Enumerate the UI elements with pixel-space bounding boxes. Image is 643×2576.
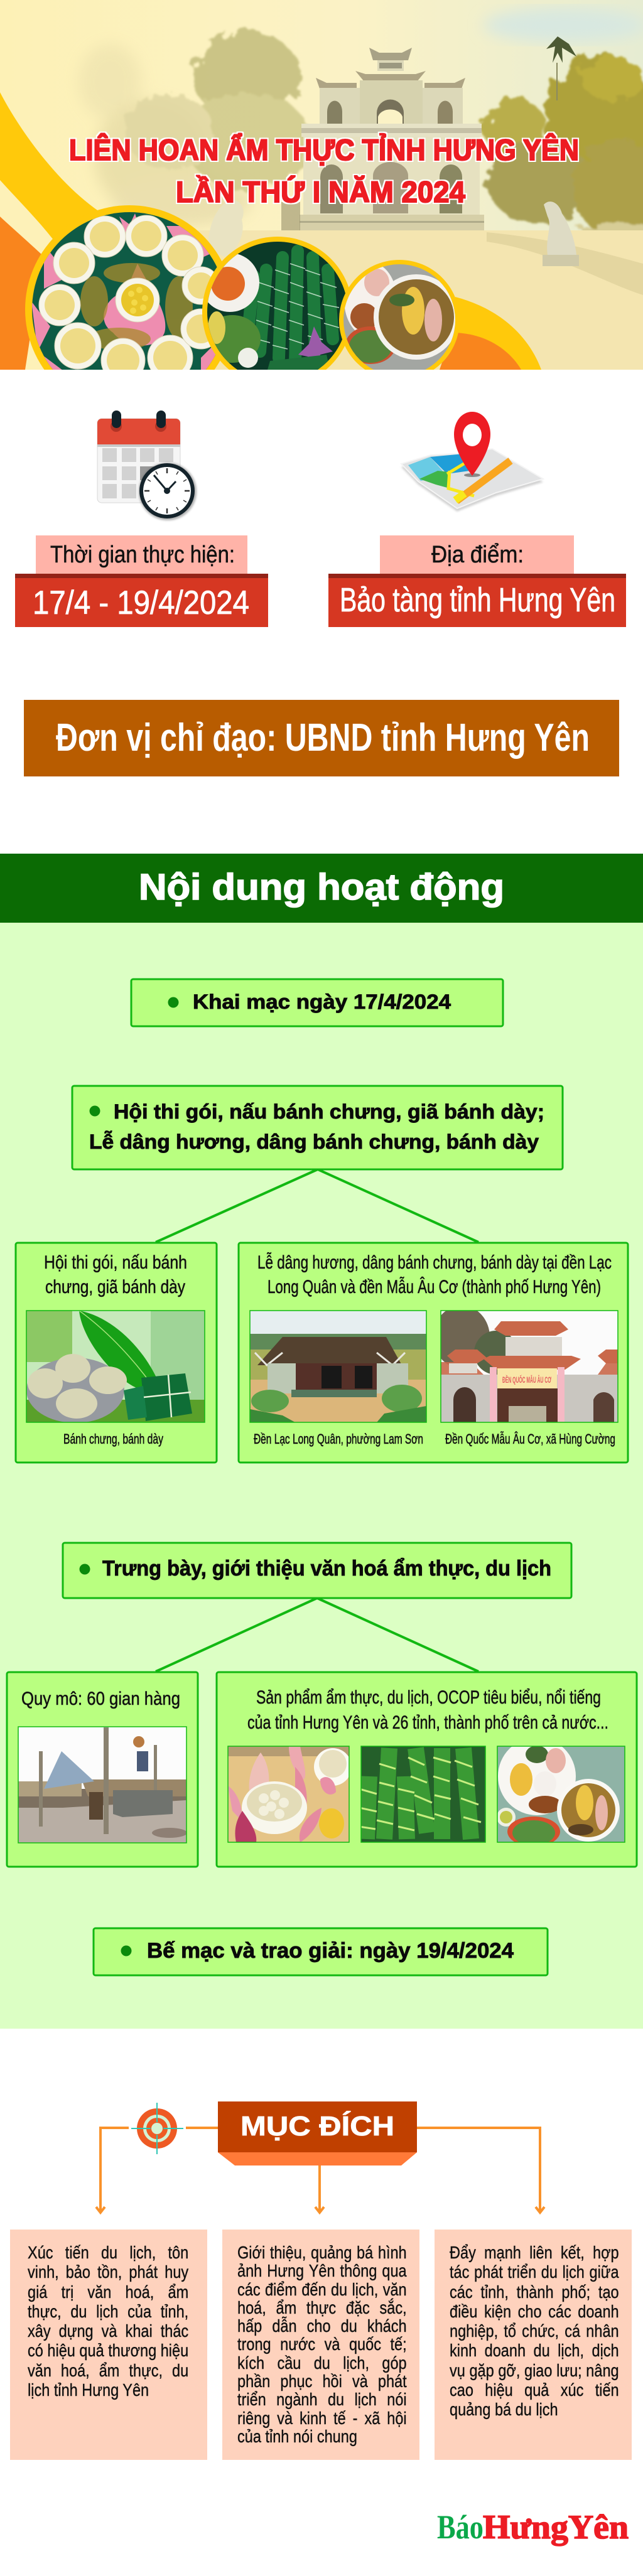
- activity: closing: [94, 1928, 548, 1975]
- panel: purpose three: nghiệp, tổ chức, cá nhân: [450, 2321, 619, 2341]
- lower right swoosh: [452, 297, 541, 370]
- icon: map with location pin: [401, 412, 543, 512]
- panel: scale: [7, 1672, 198, 1867]
- activity: closing: Bế mạc và trao giải: ngày 19/4/2024: [147, 1939, 514, 1963]
- panel: purpose one: giá trị văn hoá, ẩm: [28, 2282, 188, 2301]
- activity: opening: Khai mạc ngày 17/4/2024: [193, 990, 451, 1013]
- temple gate: [281, 48, 484, 230]
- arrows: purpose connectors: [96, 2128, 544, 2213]
- panel: purpose three: [435, 2230, 632, 2460]
- photo: noodle platter: [497, 1746, 624, 1842]
- label: venue: Địa điểm:: [431, 542, 524, 568]
- panel: purpose one: thực, du lịch của tỉnh,: [28, 2302, 188, 2321]
- activity: opening: [131, 979, 503, 1026]
- stone lion statue left: [208, 200, 244, 257]
- photo: Quoc Mau Au Co temple: [433, 1306, 618, 1422]
- stone lion statue right: [543, 201, 579, 266]
- panel: purpose one: xây dựng và khai thác: [28, 2321, 188, 2341]
- food circle: banh gio rolls: [202, 237, 349, 370]
- heading: purpose: MỤC ĐÍCH: [240, 2110, 394, 2142]
- logo: Bao Hung Yen: HưngYên: [483, 2508, 629, 2546]
- hero title: [69, 133, 579, 208]
- heading: activities: [0, 854, 643, 923]
- panel: purpose three: vụ gặp gỡ, giao lưu; nâng: [450, 2360, 619, 2380]
- connector: contest branches: [156, 1169, 478, 1242]
- panel: purpose two: của tỉnh nói chung: [237, 2427, 357, 2446]
- photo: stalls under construction: [18, 1727, 187, 1843]
- panel: purpose one: vinh, bảo tồn, phát huy: [28, 2262, 188, 2282]
- food circle: noodle soup: [339, 260, 460, 380]
- value: dates: [15, 574, 268, 627]
- panel: purpose one: Xúc tiến du lịch, tôn: [28, 2243, 188, 2262]
- panel: contest detail: chưng, giã bánh dày: [45, 1277, 185, 1297]
- panel: purpose three: Đẩy mạnh liên kết, hợp: [450, 2243, 619, 2262]
- panel: incense offering: [239, 1243, 628, 1462]
- panel: purpose two: kích cầu du lịch, góp: [237, 2353, 407, 2373]
- panel: purpose two: hấp dẫn cho du khách: [237, 2316, 407, 2336]
- activity: banh chung contest: [72, 1086, 563, 1169]
- yellow swoosh: [0, 92, 99, 240]
- panel: purpose three: các tỉnh, thành phố; tạo: [450, 2282, 619, 2301]
- icon: calendar with clock: [97, 411, 197, 520]
- panel: purpose three: quảng bá du lịch: [450, 2400, 558, 2419]
- activity: banh chung contest: Hội thi gói, nấu bánh chưng, giã bánh dày;: [114, 1100, 544, 1123]
- panel: purpose one: văn hoá, ẩm thực, du: [28, 2360, 188, 2380]
- panel: purpose three: điều kiện cho các doanh: [450, 2302, 619, 2321]
- panel: activity background: [0, 923, 643, 2029]
- panel: contest detail: Hội thi gói, nấu bánh: [44, 1252, 187, 1273]
- palm tree: [546, 36, 576, 100]
- hero banner: [0, 0, 643, 370]
- panel: purpose three: tác phát triển du lịch giữa: [450, 2262, 619, 2282]
- heading: purpose: [218, 2101, 417, 2165]
- panel: contest detail: Bánh chưng, bánh dày: [63, 1431, 163, 1447]
- panel: purpose one: có hiệu quả thương hiệu: [28, 2341, 188, 2360]
- hero title: LẦN THỨ I NĂM 2024: [176, 175, 465, 208]
- panel: purpose one: lịch tỉnh Hưng Yên: [28, 2380, 149, 2400]
- panel: purpose one: [10, 2230, 207, 2460]
- panel: purpose two: [222, 2230, 419, 2460]
- panel: products: [217, 1672, 637, 1867]
- label: venue: [380, 535, 574, 574]
- panel: purpose three: cao hiệu quả xúc tiến: [450, 2380, 619, 2400]
- photo: Quoc Mau Au Co temple: ĐỀN QUỐC MẪU ÂU CƠ: [502, 1374, 551, 1385]
- value: dates: 17/4 - 19/4/2024: [33, 584, 249, 621]
- photo: lotus sweet soup: [228, 1746, 352, 1842]
- icon: target: [131, 2103, 183, 2154]
- label: implementation time: [36, 535, 247, 574]
- ground: [188, 230, 643, 370]
- directing unit banner: [24, 700, 619, 776]
- panel: purpose two: riêng và kinh tế - xã hội: [237, 2408, 407, 2428]
- value: venue name: [328, 574, 626, 627]
- cream wedge: [0, 180, 53, 239]
- activity: exhibition: [63, 1543, 571, 1598]
- panel: purpose two: triển ngành du lịch nói: [237, 2390, 407, 2409]
- panel: purpose three: kinh doanh du lịch, dịch: [450, 2341, 619, 2360]
- food circle: lotus seed sweet soup: [25, 205, 222, 370]
- activity: banh chung contest: Lễ dâng hương, dâng bánh chưng, bánh dày: [89, 1130, 539, 1153]
- hero title: LIÊN HOAN ẨM THỰC TỈNH HƯNG YÊN: [69, 133, 579, 166]
- photo: Lac Long Quan temple: [250, 1311, 426, 1422]
- panel: purpose two: ảnh Hưng Yên thông qua: [237, 2261, 407, 2280]
- panel: purpose two: các điểm đến du lịch, văn: [237, 2280, 407, 2299]
- activity: exhibition: Trưng bày, giới thiệu văn hoá ẩm thực, du lịch: [102, 1557, 551, 1580]
- heading: activities: Nội dung hoạt động: [139, 867, 504, 908]
- logo: Bao Hung Yen: Báo: [437, 2508, 484, 2546]
- panel: purpose two: hoá, ẩm thực đặc sắc,: [237, 2298, 407, 2317]
- connector: exhibition branches: [156, 1598, 478, 1672]
- panel: scale: Quy mô: 60 gian hàng: [21, 1688, 180, 1709]
- panel: incense offering: Đền Lạc Long Quân, phường Lam Sơn: [254, 1431, 423, 1447]
- panel: contest detail: [16, 1243, 217, 1462]
- label: implementation time: Thời gian thực hiện:: [50, 542, 235, 568]
- panel: purpose two: trong nước và quốc tế;: [237, 2334, 407, 2354]
- panel: purpose two: Giới thiệu, quảng bá hình: [237, 2243, 407, 2262]
- photo: banh chung and banh day: [26, 1311, 205, 1423]
- panel: purpose two: phần phục hồi và phát: [237, 2371, 407, 2391]
- orange corner: [0, 217, 43, 370]
- trees in background: [78, 30, 643, 260]
- photo: wrapped rolls: [359, 1746, 485, 1842]
